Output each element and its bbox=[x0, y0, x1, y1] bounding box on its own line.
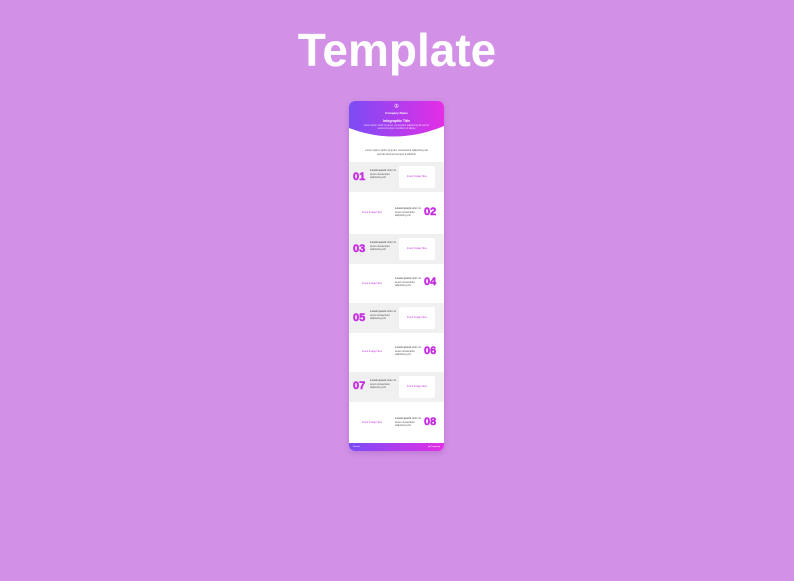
infographic card bbox=[349, 101, 444, 451]
row 03: Lorem ipsum dolor sit amet consectetur adipiscing elit bbox=[370, 241, 396, 251]
row 01: Insert Image Here bbox=[407, 175, 427, 178]
header text: ♔ bbox=[394, 104, 399, 110]
row 05: 05 bbox=[353, 312, 365, 324]
row 04: 04 bbox=[424, 276, 436, 288]
row 05 bbox=[349, 303, 444, 333]
row 05: Insert Image Here bbox=[407, 316, 427, 319]
row 08: 08 bbox=[424, 416, 436, 428]
row 01 bbox=[349, 162, 444, 192]
row 07: Insert Image Here bbox=[407, 385, 427, 388]
intro text: Lorem ipsum dolor sit amet, consectetur adipiscing elit sed do eiusmod tempor incididunt bbox=[365, 149, 428, 156]
row 08 bbox=[349, 402, 444, 443]
row 07: Lorem ipsum dolor sit amet consectetur adipiscing elit bbox=[370, 379, 396, 389]
row 04 bbox=[349, 264, 444, 303]
row 06: Lorem ipsum dolor sit amet consectetur adipiscing elit bbox=[395, 346, 421, 356]
footer: Source bbox=[353, 446, 360, 448]
row 02: Insert Image Here bbox=[362, 211, 382, 214]
header text: Lorem ipsum dolor sit amet, consectetur adipiscing elit sed do eiusmod tempor incididunt ut labore bbox=[364, 124, 429, 130]
row 06: 06 bbox=[424, 345, 436, 357]
row 03 bbox=[349, 234, 444, 264]
header text: Infographic Title bbox=[383, 119, 410, 123]
row 04: Lorem ipsum dolor sit amet consectetur adipiscing elit bbox=[395, 277, 421, 287]
footer bbox=[349, 443, 444, 451]
row 05: Lorem ipsum dolor sit amet consectetur adipiscing elit bbox=[370, 310, 396, 320]
row 06 bbox=[349, 333, 444, 372]
row 02 bbox=[349, 192, 444, 234]
row 01: 01 bbox=[353, 171, 365, 183]
row 04: Insert Image Here bbox=[362, 282, 382, 285]
row 06: Insert Image Here bbox=[362, 350, 382, 353]
row 08: Lorem ipsum dolor sit amet consectetur adipiscing elit bbox=[395, 417, 421, 427]
title: Template bbox=[298, 24, 496, 76]
row 03: Insert Image Here bbox=[407, 247, 427, 250]
header gradient bbox=[349, 101, 444, 136]
row 07: 07 bbox=[353, 380, 365, 392]
row 02: 02 bbox=[424, 206, 436, 218]
footer: ◆ Company bbox=[428, 446, 440, 448]
row 03: 03 bbox=[353, 243, 365, 255]
header text bbox=[364, 104, 430, 130]
row 01: Lorem ipsum dolor sit amet consectetur adipiscing elit bbox=[370, 169, 396, 179]
header text: Company Name bbox=[385, 111, 408, 115]
row 02: Lorem ipsum dolor sit amet consectetur adipiscing elit bbox=[395, 207, 421, 217]
row 07 bbox=[349, 372, 444, 402]
row 08: Insert Image Here bbox=[362, 421, 382, 424]
